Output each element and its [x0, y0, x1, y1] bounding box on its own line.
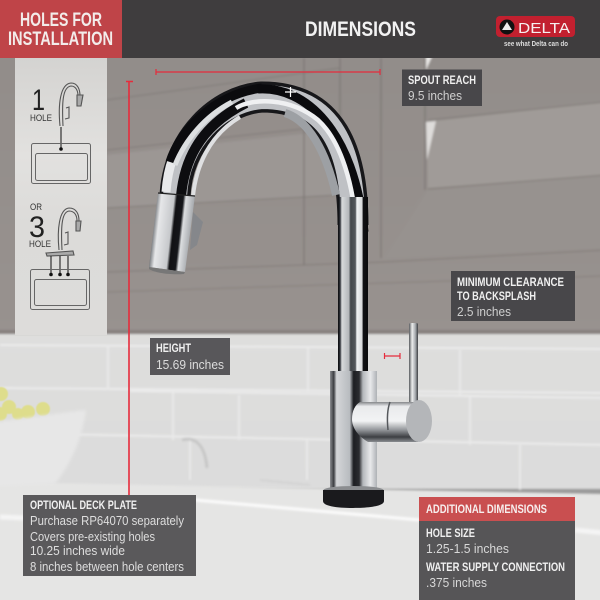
callout: height: HEIGHT [156, 341, 192, 355]
logo: Delta: see what Delta can do [504, 39, 568, 48]
hole size [426, 526, 509, 556]
countertop [0, 482, 600, 600]
panel: additional dimensions [419, 497, 575, 600]
callout: optional deck plate [23, 495, 196, 576]
panel heading [419, 497, 575, 521]
lemons and bowl [0, 387, 86, 486]
heading: holes for installation [0, 0, 122, 58]
clearance dimension marker [384, 353, 400, 359]
left panel: holes for installation [0, 0, 122, 335]
heading: holes for installation: HOLES FOR [20, 10, 102, 31]
option: 3 holes [29, 202, 90, 310]
spray head seam [158, 193, 195, 196]
logo: Delta: DELTA [518, 20, 570, 37]
faucet [149, 87, 432, 508]
option: 1 hole [30, 83, 90, 184]
callout: spout reach: 9.5 inches [408, 88, 462, 103]
callout: height [150, 338, 230, 375]
callout: minimum clearance: MINIMUM CLEARANCE [457, 275, 564, 289]
option: 3 holes: 3 [29, 211, 45, 244]
option: 1 hole: HOLE [30, 113, 52, 124]
logo: Delta [496, 16, 575, 48]
icon: single-hole sink [32, 144, 90, 184]
icon: single-hole faucet [59, 83, 83, 149]
spray trigger [190, 212, 203, 250]
heading: holes for installation: INSTALLATION [8, 29, 113, 50]
pull-down spray head [149, 193, 195, 272]
panel background [15, 58, 107, 335]
callout: optional deck plate: Purchase RP64070 separately [30, 513, 184, 528]
callout: spout reach [402, 70, 482, 106]
spout reach dimension line [156, 69, 380, 75]
callout: optional deck plate: 8 inches between hole centers [30, 559, 184, 574]
water supply connection [426, 560, 565, 590]
sparkle highlight [285, 87, 296, 97]
panel heading: ADDITIONAL DIMENSIONS [426, 502, 547, 516]
callout: minimum clearance: TO BACKSPLASH [457, 289, 536, 303]
black base [323, 486, 384, 508]
callout: height: 15.69 inches [156, 357, 224, 372]
option: 3 holes: HOLE [29, 239, 51, 250]
faucet spout [166, 88, 364, 235]
callout: optional deck plate: OPTIONAL DECK PLATE [30, 498, 137, 512]
icon: three-hole sink [30, 270, 90, 310]
hole size: 1.25-1.5 inches [426, 541, 509, 556]
faucet body [330, 371, 377, 490]
callout: spout reach: SPOUT REACH [408, 73, 476, 87]
cabinet wall [0, 0, 600, 335]
tile backsplash [0, 334, 600, 490]
spray face [149, 267, 185, 274]
faucet stem [338, 197, 368, 375]
height dimension line [126, 81, 133, 497]
handle cylinder [352, 400, 432, 442]
header band [0, 0, 600, 58]
option: 1 hole: 1 [32, 84, 45, 117]
icon: three-hole faucet [46, 208, 81, 275]
callout: optional deck plate: Covers pre-existing holes [30, 529, 155, 544]
handle lever [409, 323, 418, 403]
option: 3 holes: OR [30, 202, 42, 213]
icon: Delta mark [500, 20, 514, 34]
title: DIMENSIONS [305, 18, 416, 41]
hole size: HOLE SIZE [426, 526, 475, 540]
callout: minimum clearance [451, 271, 575, 321]
callout: optional deck plate: 10.25 inches wide [30, 543, 125, 558]
water supply connection: .375 inches [426, 575, 487, 590]
water supply connection: WATER SUPPLY CONNECTION [426, 560, 565, 574]
callout: minimum clearance: 2.5 inches [457, 304, 511, 319]
